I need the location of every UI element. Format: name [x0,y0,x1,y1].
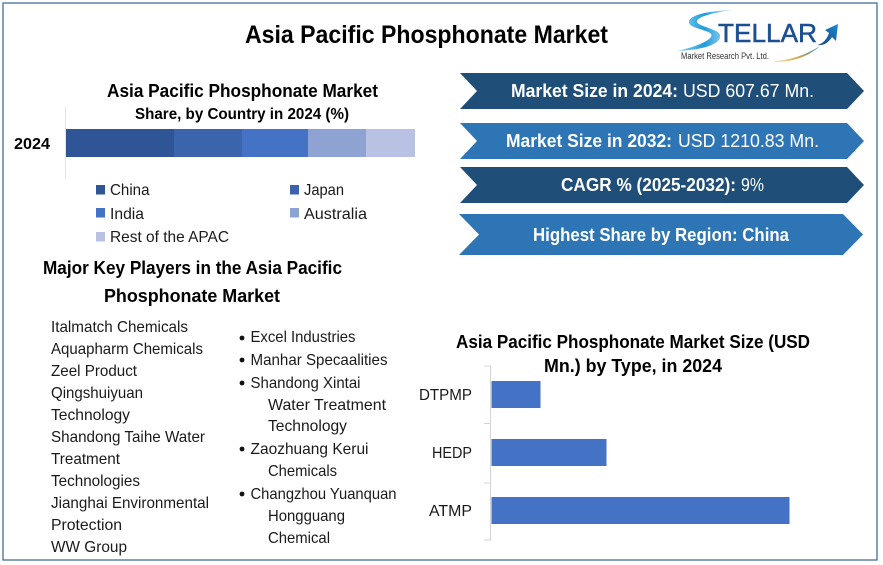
bar: ATMP [429,497,790,524]
arrow: market size 2024: USD 607.67 Mn. [683,81,814,101]
key players list: left column: Treatment [51,451,121,468]
key players list: right column: Zaozhuang Kerui [250,441,368,458]
arrow: market size 2024: Market Size in 2024: [511,81,678,101]
key players list: left column: Italmatch Chemicals [51,319,188,336]
key players list: left column: Zeel Product [51,363,138,380]
legend: Rest of the APAC [110,229,229,246]
bar: HEDP [432,439,606,466]
key players list: right column: Shandong Xintai [250,375,360,392]
key players heading: Phosphonate Market [104,286,280,306]
chart heading: Asia Pacific Phosphonate Market [107,80,378,101]
key players list: right column: Chemicals [268,463,337,480]
key players list: left column [51,319,209,556]
arrow: CAGR [460,167,864,203]
chart heading: Asia Pacific Phosphonate Market Size (USD [456,332,810,352]
bar: DTPMP: DTPMP [419,387,472,404]
key players list: left column: Jianghai Environmental [51,495,209,512]
key players list: right column: Excel Industries [250,329,356,346]
panel: major key players [43,258,396,556]
arrow: market size 2032: Market Size in 2032: [506,131,672,151]
legend: Japan [304,182,344,199]
arrow: market size 2032: USD 1210.83 Mn. [678,131,819,151]
legend [96,182,367,246]
chart heading: Mn.) by Type, in 2024 [544,356,722,376]
arrow: market size 2032 [460,123,864,159]
logo: Stellar Market Research [677,10,838,62]
key players list: right column: Manhar Specaalities [250,352,388,369]
key players list: right column: Technology [268,418,347,435]
key players list: left column: Technology [51,407,130,424]
bar: ATMP: ATMP [429,503,472,520]
key players list: left column: WW Group [51,539,127,556]
key players heading [43,258,342,306]
panel: market size by type chart [419,332,810,540]
key players list: right column: Chemical [268,530,330,547]
key players list: left column: Aquapharm Chemicals [51,341,203,358]
arrow: CAGR: 9% [741,175,764,195]
year label: 2024 [14,136,50,153]
arrow: highest share: Highest Share by Region: China [533,225,790,245]
legend: China [110,182,150,199]
chart heading [456,332,810,376]
key players list: right column: Hongguang [268,508,345,525]
arrow: market size 2024 [460,73,864,109]
logo: Stellar Market Research: Market Research Pvt. Ltd. [681,51,769,61]
logo: Stellar Market Research: TELLAR [718,18,817,48]
key players list: left column: Shandong Taihe Water [51,429,206,446]
title: Asia Pacific Phosphonate Market [245,21,609,49]
key players list: right column [240,329,396,547]
key players list: left column: Protection [51,517,122,534]
legend: India [110,206,144,223]
arrow: highest share [459,214,863,255]
bar: HEDP: HEDP [432,445,472,462]
key players list: left column: Qingshuiyuan [51,385,143,402]
stacked bar [66,129,415,157]
panel: share by country chart [14,80,415,246]
key players heading: Major Key Players in the Asia Pacific [43,258,342,278]
panel: key metrics arrows [459,73,864,255]
key players list: right column: Changzhou Yuanquan [250,486,396,503]
key players list: left column: Technologies [51,473,140,490]
key players list: right column: Water Treatment [268,397,387,414]
legend: Australia [304,206,367,223]
bar: DTPMP [419,381,540,408]
arrow: CAGR: CAGR % (2025-2032): [561,175,736,195]
chart subheading: Share, by Country in 2024 (%) [135,106,349,123]
